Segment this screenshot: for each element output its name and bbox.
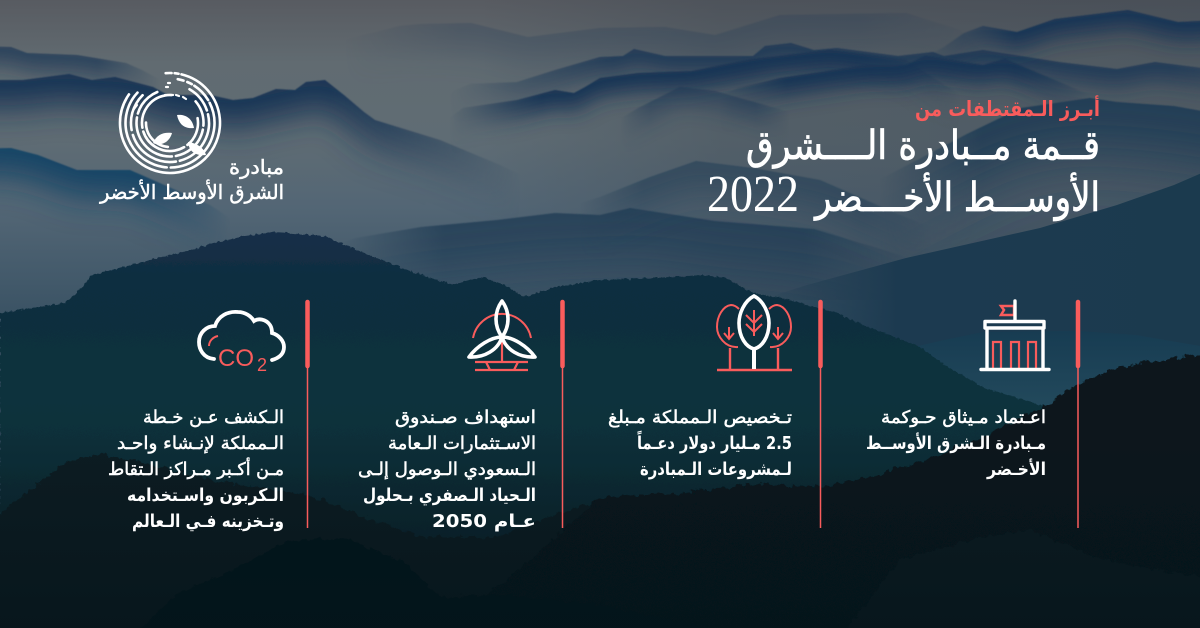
text: carbon capture: وتـخزينه فـي الـعالم	[132, 512, 284, 532]
icon: wind turbine	[469, 301, 535, 370]
text: carbon capture: الـمملكة لإنـشاء واحـد	[117, 434, 284, 454]
kicker: أبـرز الـمقتطفات من	[915, 94, 1100, 121]
text: net zero	[358, 408, 536, 532]
forest right	[420, 350, 1200, 628]
title line 1: قــمة مــبادرة الــــشرق	[746, 123, 1100, 169]
divider	[560, 302, 565, 528]
divider	[1076, 302, 1080, 528]
logo wordmark	[99, 155, 284, 204]
icon: CO2 cloud: 2	[257, 355, 267, 375]
text: governance charter	[866, 408, 1046, 480]
title line 2: الأوســـط الأخــــضر	[813, 172, 1100, 221]
panel: governance charter	[866, 301, 1078, 528]
icon: CO2 cloud: CO	[218, 345, 254, 372]
panel: carbon capture	[108, 302, 308, 532]
icon: trees	[717, 296, 792, 370]
text: carbon capture	[108, 408, 284, 532]
logo wordmark: الشرق الأوسط الأخضر	[99, 180, 284, 204]
second right ridge	[880, 331, 1200, 470]
logo wordmark: مبادرة	[229, 155, 284, 179]
forest foreground	[119, 537, 700, 628]
text: governance charter: الأخـضر	[986, 458, 1046, 480]
text: carbon capture: الـكشف عـن خـطة	[143, 408, 284, 428]
forest left	[0, 454, 640, 628]
divider	[305, 302, 310, 528]
text: net zero: استهداف صـندوق	[395, 408, 536, 428]
divider	[818, 302, 823, 528]
text: funding: تـخصيص الـمملكة مـبلغ	[608, 408, 792, 428]
text: governance charter: مـبادرة الـشرق الأوســط	[866, 432, 1046, 454]
logo mark: concentric dashed rings with leaves	[116, 69, 224, 177]
text: governance charter: اعـتماد مـيثاق حـوكمة	[881, 408, 1046, 428]
heading block	[707, 94, 1100, 223]
icon: CO2 cloud	[199, 312, 284, 375]
text: funding: 2.5 مـليار دولار دعـماً	[637, 430, 792, 454]
text: funding: لـمشروعات الـمبادرة	[640, 460, 792, 480]
text: carbon capture: الـكربون واسـتخدامه	[127, 486, 284, 506]
text: net zero: الاسـتثمارات الـعامة	[388, 434, 536, 454]
panel: funding	[608, 296, 820, 528]
text: net zero: الـحياد الـصفري بـحلول	[363, 486, 536, 506]
icon: government building	[981, 301, 1049, 370]
text: funding	[608, 408, 792, 480]
logo: Middle East Green Initiative	[99, 69, 284, 204]
main ridge	[0, 232, 1200, 628]
panel: net zero	[358, 301, 562, 532]
text: carbon capture: مـن أكـبر مـراكز الـتقاط	[108, 457, 284, 480]
text: net zero: الـسعودي الـوصول إلـى	[358, 460, 536, 480]
title year: 2022	[707, 165, 799, 223]
text: net zero: عـام 2050	[432, 512, 536, 532]
